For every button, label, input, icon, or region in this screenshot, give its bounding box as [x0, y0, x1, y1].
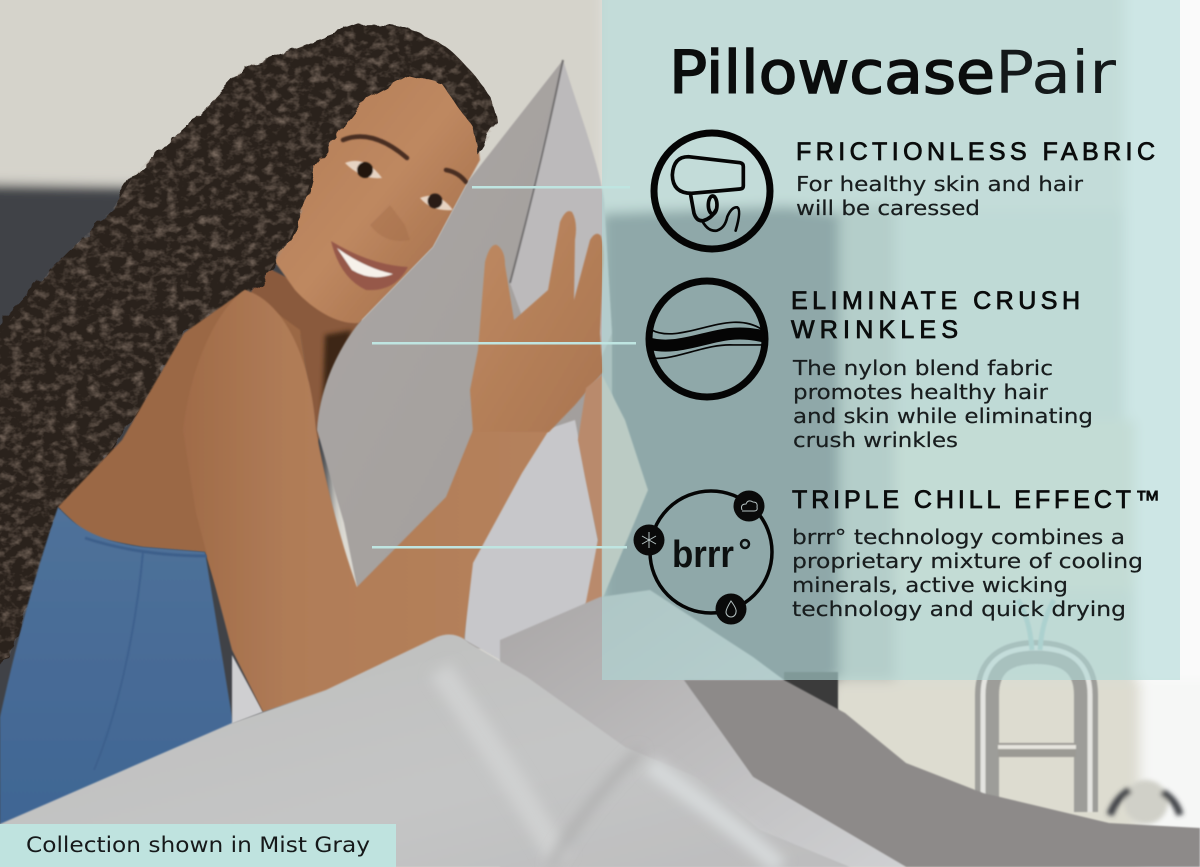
woman: facial features	[331, 137, 466, 290]
callout line: wrinkles	[372, 342, 636, 344]
heading and text: eliminate crush wrinkles: and skin while eliminating	[793, 404, 1093, 428]
headboard bead column	[784, 215, 838, 716]
title	[669, 38, 1117, 107]
heading and text: eliminate crush wrinkles: crush wrinkles	[793, 428, 958, 452]
woman: face	[275, 70, 480, 323]
gray duvet: rear fold	[500, 590, 1200, 867]
gray pillow	[232, 60, 625, 724]
icon: hair dryer	[654, 133, 770, 249]
heading and text: triple chill effect: technology and quick drying	[792, 597, 1126, 621]
collection caption	[0, 824, 396, 867]
alarm clock	[1110, 780, 1180, 824]
callout line: chill	[372, 546, 627, 548]
heading and text: triple chill effect	[792, 486, 1160, 621]
icon: fabric wave	[645, 281, 768, 397]
heading and text: triple chill effect: minerals, active wicking	[792, 573, 1068, 597]
heading and text: eliminate crush wrinkles	[791, 287, 1093, 452]
heading and text: triple chill effect: brrr° technology combines a	[792, 525, 1125, 549]
heading and text: triple chill effect: TRIPLE CHILL EFFECT™	[792, 486, 1160, 514]
lamp base	[983, 600, 1090, 812]
title: Pillowcase	[669, 38, 995, 107]
heading and text: frictionless fabric: For healthy skin and hair	[796, 172, 1084, 196]
heading and text: triple chill effect: proprietary mixture of cooling	[792, 549, 1143, 573]
heading and text: frictionless fabric: FRICTIONLESS FABRIC	[796, 138, 1155, 166]
icon: brrr badge: brrr	[672, 534, 734, 576]
woman: hand on pillow	[470, 211, 604, 432]
woman: neck	[250, 265, 362, 440]
heading and text: eliminate crush wrinkles: ELIMINATE CRUSH	[791, 287, 1080, 315]
callout line: fabric	[472, 186, 630, 188]
heading and text: eliminate crush wrinkles: promotes healthy hair	[793, 380, 1049, 404]
title: Pair	[995, 38, 1117, 107]
translucent info panel	[602, 0, 1180, 680]
heading and text: frictionless fabric	[796, 138, 1155, 220]
icon: brrr badge	[634, 490, 772, 624]
woman: back	[58, 290, 318, 660]
woman: hair	[0, 25, 498, 670]
collection caption: Collection shown in Mist Gray	[26, 833, 370, 857]
blue top	[0, 507, 233, 825]
heading and text: frictionless fabric: will be caressed	[796, 196, 980, 220]
gray duvet: front	[0, 635, 850, 867]
woman: arm	[183, 290, 549, 712]
woman: second hand	[578, 375, 648, 610]
heading and text: eliminate crush wrinkles: The nylon blend fabric	[792, 356, 1053, 380]
heading and text: eliminate crush wrinkles: WRINKLES	[791, 316, 958, 344]
